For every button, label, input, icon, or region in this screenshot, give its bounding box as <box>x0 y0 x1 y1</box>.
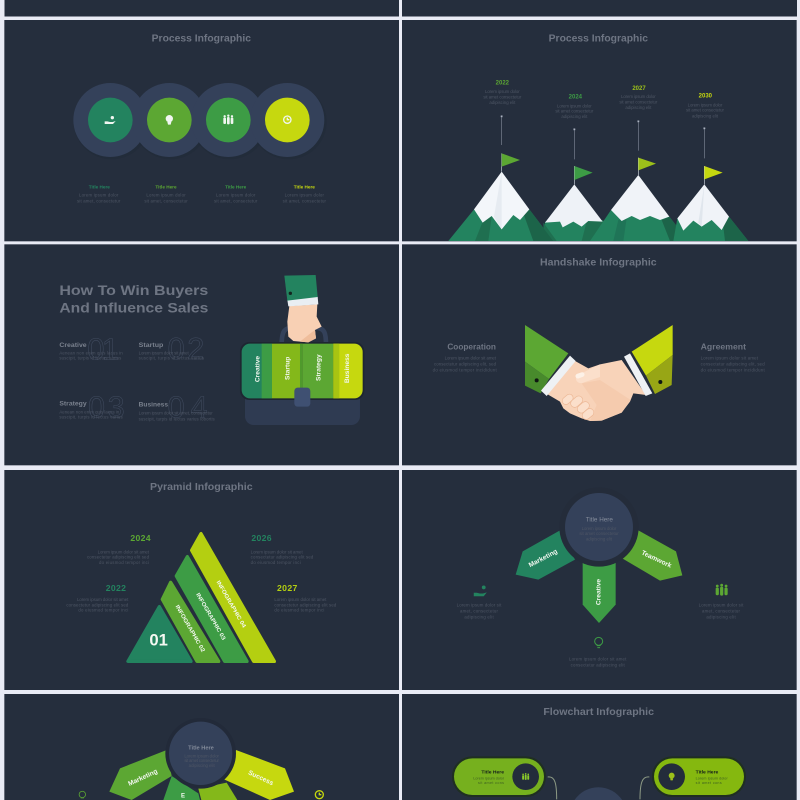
petal: creative <box>583 561 616 623</box>
icon: handshake <box>525 325 673 421</box>
connector: left curve <box>548 777 557 799</box>
label: 2022 <box>66 583 129 613</box>
icon: phone clock <box>284 116 291 123</box>
step labels: Lorem ipsum dolor <box>79 193 119 198</box>
label: 2022: consectetur adipiscing elit sed <box>66 602 129 607</box>
label: 2026: consectetur adipiscing elit sed <box>251 555 314 560</box>
step labels: Title Here <box>155 185 177 190</box>
icon: briefcase: Creative <box>255 356 262 382</box>
year labels: adipiscing elit <box>489 100 516 105</box>
year labels: adipiscing elit <box>625 105 652 110</box>
icon: briefcase: Startup <box>284 357 291 380</box>
item: business 04: Lorem ipsum dolor sit amet, consectetur <box>139 411 213 416</box>
center circle: Lorem ipsum dolor <box>184 753 220 758</box>
panel: top left slide remnant <box>4 0 399 16</box>
panel: handshake <box>402 244 797 465</box>
item: business 04: 04 <box>168 391 208 425</box>
heading: flowchart infographic: Flowchart Infographic <box>543 707 654 718</box>
panel: wide arrow flower <box>4 694 399 800</box>
heading: how to win buyers <box>59 283 209 315</box>
item: business 04: Business <box>139 403 169 409</box>
step labels: sit amet, consectetur <box>283 198 327 203</box>
petal: marketing: Marketing <box>528 548 559 569</box>
label: 2026: 2026 <box>251 533 272 543</box>
panel: briefcase sales <box>4 244 399 465</box>
step labels: Lorem ipsum dolor <box>285 193 325 198</box>
year labels: adipiscing elit <box>561 114 588 119</box>
label: 2024: consectetur adipiscing elit sed <box>87 555 150 560</box>
center circle: adipiscing elit <box>586 536 613 541</box>
item: strategy 03: Aenean non enim quis lacus in <box>59 409 120 414</box>
center circle: sit amet consectetur <box>579 531 619 536</box>
icon: people <box>223 114 233 124</box>
item: creative 01: 01 <box>87 333 119 367</box>
pill: right item: Title Here <box>696 770 719 776</box>
heading: how to win buyers: And Influence Sales <box>59 300 209 315</box>
pill: left item <box>452 756 546 797</box>
text: cooperation: do eiusmod tempor incididunt <box>433 367 497 372</box>
item: business 04 <box>139 391 215 425</box>
text: marketing note <box>457 602 502 619</box>
label: 2027 <box>274 583 337 613</box>
text: cooperation: Cooperation <box>447 342 496 351</box>
step labels: sit amet, consectetur <box>144 198 188 203</box>
item: strategy 03 <box>59 391 125 425</box>
label: 2022: Lorem ipsum dolor sit amet <box>77 597 129 602</box>
year labels: 2022 <box>496 81 510 87</box>
item: creative 01: Creative <box>59 343 87 349</box>
panel: pyramid <box>4 470 399 690</box>
petal: success: Success <box>247 769 275 787</box>
step labels: Lorem ipsum dolor <box>146 193 186 198</box>
item: startup 02 <box>139 332 204 366</box>
label: 2022: 2022 <box>106 583 126 593</box>
item: startup 02: Lorem ipsum dolor sit amet <box>139 350 189 355</box>
item: startup 02: Startup <box>139 343 164 349</box>
text: cooperation <box>433 342 497 372</box>
label: 2027: 2027 <box>277 583 298 593</box>
text: agreement: Agreement <box>701 342 746 351</box>
connector: right curve <box>640 777 649 799</box>
text: teamwork note: Lorem ipsum dolor sit <box>699 602 744 607</box>
marker lines <box>501 115 705 159</box>
item: startup 02: suscipit, turpis id lectus varius <box>139 356 204 361</box>
label: 2024 <box>87 533 151 565</box>
text: marketing note: amet, consectetur <box>460 608 499 613</box>
text: creative note: Lorem ipsum dolor sit amet <box>569 656 627 661</box>
item: business 04: suscipit, turpis id lectus varius lobortis <box>139 416 215 421</box>
label: 2024: do eiusmod tempor inci <box>99 560 149 565</box>
mountain 3 <box>590 175 688 241</box>
petal: lower left: E <box>181 793 185 799</box>
item: creative 01: Aenean non enim quis lacus in <box>59 350 123 355</box>
text: cooperation: Lorem ipsum dolor sit amet <box>445 355 497 360</box>
pill: right item: sit amet cons <box>696 781 722 785</box>
text: teamwork note: adipiscing elit <box>706 614 736 619</box>
circle chain <box>73 83 327 159</box>
step labels: sit amet, consectetur <box>77 198 121 203</box>
icon: bulb green <box>595 637 603 648</box>
step labels: Lorem ipsum dolor <box>216 193 256 198</box>
label: 2027: consectetur adipiscing elit sed <box>274 602 337 607</box>
year labels: sit amet consectetur <box>483 94 522 99</box>
center circle: Title Here <box>586 516 613 523</box>
petal: success <box>224 750 294 800</box>
year labels: Lorem ipsum dolor <box>621 94 656 99</box>
text: marketing note: adipiscing elit <box>464 614 494 619</box>
center circle: Title Here <box>188 746 214 752</box>
petal: teamwork <box>623 530 682 581</box>
panel: arrow flower <box>402 470 797 690</box>
year labels: 2027 <box>632 86 646 92</box>
step labels: sit amet, consectetur <box>214 198 258 203</box>
text: agreement: Lorem ipsum dolor sit amet <box>701 355 759 360</box>
item: strategy 03: Strategy <box>59 401 87 407</box>
petal: lower right <box>198 783 237 800</box>
item: startup 02: 02 <box>168 332 204 366</box>
year labels: 2030 <box>699 93 713 99</box>
petal: marketing <box>109 750 172 800</box>
year labels: sit amet consectetur <box>555 108 594 113</box>
year labels: 2024 <box>569 94 583 100</box>
petal: creative: Creative <box>596 579 603 605</box>
pyramid chart: 01 <box>149 631 168 650</box>
year labels: adipiscing elit <box>692 113 719 118</box>
step labels: Title Here <box>89 185 110 190</box>
center circle <box>575 787 622 800</box>
pyramid chart: INFOGRAPHIC 03 <box>194 592 226 641</box>
petal: lower left <box>163 776 200 800</box>
text: marketing note: Lorem ipsum dolor sit <box>457 602 502 607</box>
text: agreement: consectetur adipiscing elit, sed <box>701 361 765 366</box>
mountain 1 <box>448 172 553 241</box>
icon: hand with coin <box>105 116 116 124</box>
petal: marketing: Marketing <box>127 768 159 788</box>
year labels: sit amet consectetur <box>686 108 725 113</box>
center circle: Lorem ipsum dolor <box>582 526 617 531</box>
pyramid chart <box>128 534 274 661</box>
pyramid chart: INFOGRAPHIC 04 <box>215 580 247 630</box>
step labels: Title Here <box>225 185 247 190</box>
icon: people green <box>716 584 728 596</box>
year labels: Lorem ipsum dolor <box>485 89 520 94</box>
pill: left item: Title Here <box>481 770 504 776</box>
icon: hand teal <box>474 585 487 596</box>
icon: briefcase <box>240 328 364 425</box>
icon: bulb <box>79 791 86 798</box>
text: agreement <box>701 342 765 372</box>
label: 2026 <box>251 533 314 565</box>
text: teamwork note: amet, consectetur <box>702 608 741 613</box>
icon: light bulb <box>166 115 173 125</box>
center circle <box>559 487 639 567</box>
panel: flowchart <box>402 694 797 800</box>
year labels: Lorem ipsum dolor <box>688 102 723 107</box>
icon: hand with sleeve <box>284 275 322 342</box>
item: strategy 03: suscipit, turpis id lectus varius <box>59 415 123 420</box>
icon: briefcase: Strategy <box>315 354 322 381</box>
step labels <box>77 185 327 203</box>
center circle: sit amet consectetur <box>184 758 220 763</box>
label: 2027: Lorem ipsum dolor sit amet <box>274 597 327 602</box>
label: 2024: Lorem ipsum dolor sit amet <box>98 549 150 554</box>
year labels: Lorem ipsum dolor <box>557 103 592 108</box>
panel: top right slide remnant <box>402 0 797 16</box>
label: 2026: Lorem ipsum dolor sit amet <box>251 549 303 554</box>
panel: mountain process <box>402 20 797 241</box>
label: 2022: do eiusmod tempor inci <box>78 608 128 613</box>
flags <box>502 153 723 184</box>
item: creative 01 <box>59 333 123 367</box>
year labels: sit amet consectetur <box>619 99 658 104</box>
heading: process infographic: Process Infographic <box>152 33 251 44</box>
item: creative 01: suscipit, turpis id lectus varius <box>59 356 121 361</box>
heading: pyramid infographic: Pyramid Infographic <box>150 482 253 493</box>
text: creative note: consectetur adipiscing elit <box>571 662 625 667</box>
center circle: adipiscing elit <box>189 763 215 768</box>
text: teamwork note <box>699 602 744 619</box>
center circle <box>165 718 236 789</box>
text: agreement: do eiusmod tempor incididunt <box>701 367 765 372</box>
step labels: Title Here <box>294 185 315 190</box>
text: cooperation: consectetur adipiscing elit, sed <box>434 361 497 366</box>
heading: how to win buyers: How To Win Buyers <box>59 283 209 298</box>
text: creative note <box>569 656 627 667</box>
label: 2026: do eiusmod tempor inci <box>251 560 301 565</box>
label: 2027: do eiusmod tempor inci <box>274 608 324 613</box>
pill: left item: Lorem ipsum dolor <box>473 777 505 781</box>
petal: marketing <box>516 530 575 580</box>
item: strategy 03: 03 <box>88 391 125 425</box>
mountain 4 <box>673 184 748 241</box>
heading: handshake infographic: Handshake Infographic <box>540 258 657 269</box>
petal: teamwork: Teamwork <box>640 550 673 570</box>
pill: right item: Lorem ipsum dolor <box>696 777 728 781</box>
heading: process infographic: Process Infographic <box>549 33 648 44</box>
icon: phone clock <box>315 791 323 799</box>
pill: left item: sit amet cons <box>478 781 504 785</box>
mountain 2 <box>543 184 617 241</box>
icon: briefcase: Business <box>344 353 351 383</box>
label: 2024: 2024 <box>130 533 151 543</box>
pill: right item <box>652 756 746 797</box>
year labels <box>483 81 725 119</box>
panel: process circles <box>4 20 399 241</box>
pyramid chart: INFOGRAPHIC 02 <box>174 604 205 653</box>
